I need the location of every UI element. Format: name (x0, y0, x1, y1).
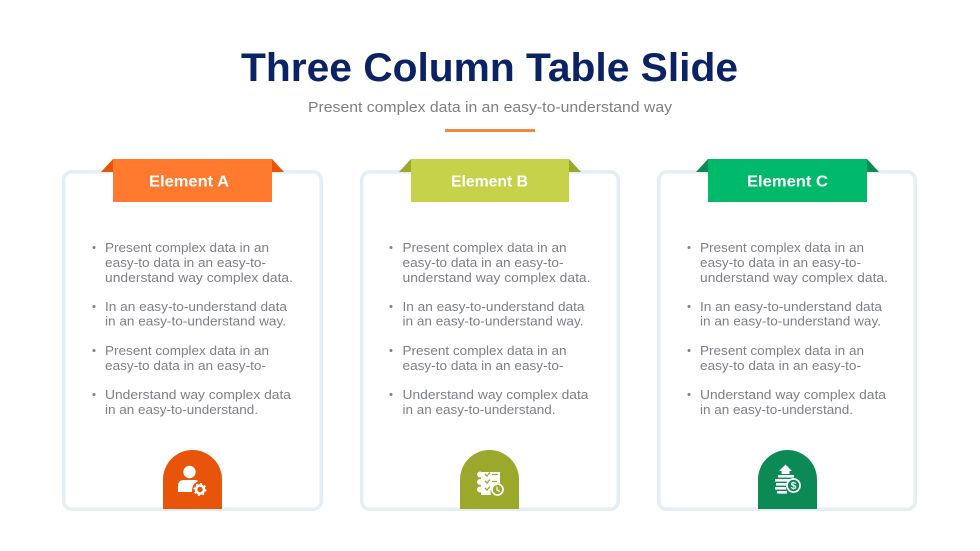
bullet list A: Understand way complex data (105, 387, 292, 402)
bullet list A: in an easy-to-understand. (105, 402, 258, 417)
panel: Element B (362, 159, 618, 509)
bullet list C: In an easy-to-understand data (700, 299, 883, 314)
ribbon: Element A: Element A (149, 174, 229, 190)
bullet list C: in an easy-to-understand. (700, 402, 853, 417)
icon tab: coins with arrow and dollar: $ (791, 481, 797, 492)
bullet list C (688, 240, 888, 417)
bullet list B: understand way complex data. (402, 270, 590, 285)
ribbon: Element C: Element C (747, 174, 828, 190)
bullet list C: in an easy-to-understand way. (700, 314, 881, 328)
icon tab: coins with arrow and dollar (758, 450, 817, 509)
ribbon: Element C (696, 159, 879, 202)
bullet list B: Present complex data in an (402, 240, 566, 255)
bullet list B: In an easy-to-understand data (402, 299, 585, 314)
bullet list B: Understand way complex data (402, 387, 589, 402)
bullet list A (92, 240, 293, 417)
card frame B (362, 172, 618, 509)
bullet list C: Present complex data in an (700, 343, 864, 358)
panel: Element A (64, 159, 321, 509)
bullet list A: Present complex data in an (105, 240, 269, 255)
bullet list B (390, 240, 590, 417)
bullet list B: in an easy-to-understand way. (402, 314, 584, 328)
bullet list A: understand way complex data. (105, 270, 293, 285)
icon tab: checklist with clock (460, 450, 519, 509)
bullet list A: easy-to data in an easy-to- (105, 255, 266, 270)
bullet list A: Present complex data in an (105, 343, 269, 358)
panel: Element C (659, 159, 915, 509)
bullet list C: easy-to data in an easy-to- (700, 255, 861, 270)
bullet list C: understand way complex data. (700, 270, 888, 285)
subtitle: Present complex data in an easy-to-understand way (308, 99, 673, 116)
bullet list C: Understand way complex data (700, 387, 887, 402)
bullet list C: easy-to data in an easy-to- (700, 358, 861, 373)
bullet list A: easy-to data in an easy-to- (105, 358, 266, 373)
bullet list B: in an easy-to-understand. (402, 402, 556, 417)
ribbon: Element B (399, 159, 581, 202)
accent line (445, 129, 535, 132)
ribbon: Element A (101, 159, 284, 202)
bullet list B: easy-to data in an easy-to- (402, 255, 564, 270)
bullet list B: easy-to data in an easy-to- (402, 358, 564, 373)
icon tab: person with gear (163, 450, 222, 509)
card frame C (659, 172, 915, 509)
bullet list A: In an easy-to-understand data (105, 299, 288, 314)
title: Three Column Table Slide (241, 46, 738, 90)
card frame A (64, 172, 321, 509)
bullet list A: in an easy-to-understand way. (105, 314, 286, 328)
ribbon: Element B: Element B (451, 174, 528, 190)
bullet list B: Present complex data in an (402, 343, 566, 358)
bullet list C: Present complex data in an (700, 240, 864, 255)
